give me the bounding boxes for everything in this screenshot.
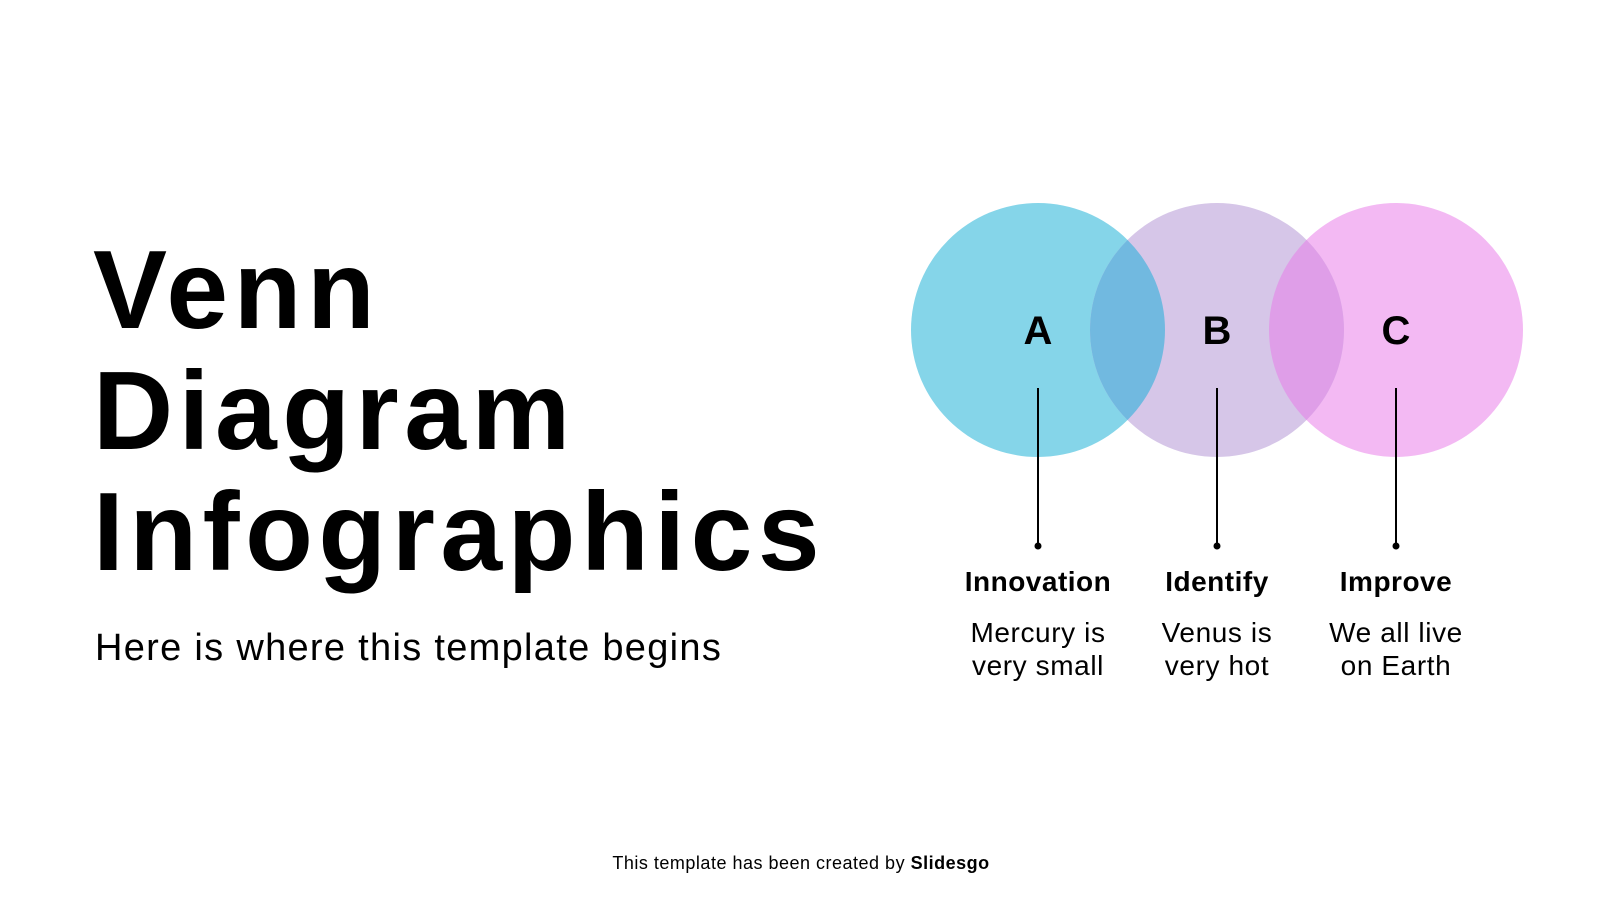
label B: very hot <box>1165 650 1269 681</box>
circle C <box>1269 203 1523 457</box>
subtitle: Here is where this template begins <box>95 627 722 669</box>
connector lines <box>1038 388 1396 546</box>
circle C: C <box>1382 309 1410 353</box>
label B: Venus is <box>1162 617 1272 648</box>
circle A: A <box>1024 309 1052 353</box>
label A <box>965 566 1111 681</box>
title: Infographics <box>93 470 825 594</box>
venn diagram <box>911 203 1523 550</box>
label C <box>1329 566 1463 681</box>
label C: We all live <box>1329 617 1463 648</box>
title: Venn <box>93 228 380 352</box>
footer: This template has been created by Slidesgo <box>612 853 990 873</box>
label C: Improve <box>1340 566 1452 597</box>
circle B: B <box>1203 309 1231 353</box>
label A: Mercury is <box>970 617 1106 648</box>
label A: very small <box>972 650 1104 681</box>
label A: Innovation <box>965 566 1111 597</box>
label B <box>1162 566 1272 681</box>
label C: on Earth <box>1341 650 1451 681</box>
title <box>93 228 825 594</box>
title: Diagram <box>93 349 576 473</box>
circle B <box>1090 203 1344 457</box>
circle A <box>911 203 1165 457</box>
label B: Identify <box>1165 566 1269 597</box>
